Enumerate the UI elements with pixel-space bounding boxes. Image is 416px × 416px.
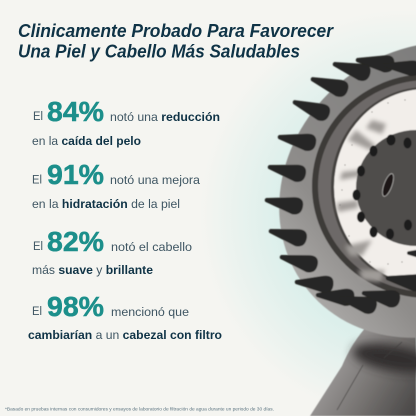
stat: 91%: notó una mejora bbox=[110, 173, 200, 187]
dark inner ring bbox=[312, 74, 416, 298]
charging slot bbox=[380, 172, 396, 198]
outer rim bbox=[219, 0, 416, 399]
stat: 82%: más suave y brillante bbox=[32, 263, 153, 277]
stat: 82% bbox=[32, 226, 192, 277]
stat: 98%: 98% bbox=[47, 291, 104, 322]
shower head product bbox=[219, 0, 416, 416]
stat: 84%: en la caída del pelo bbox=[32, 134, 141, 148]
centre plate bbox=[352, 130, 416, 246]
stat: 82%: 82% bbox=[47, 226, 104, 257]
stat: 98%: cambiarían a un cabezal con filtro bbox=[28, 328, 222, 342]
stat: 98%: El bbox=[32, 304, 42, 318]
footnote: *Basado en pruebas internas con consumidores y ensayos de laboratorio de filtración de agua durante un periodo de 30 días. bbox=[5, 406, 274, 412]
title: Clinicamente Probado Para Favorecer bbox=[18, 21, 334, 41]
stat: 91%: 91% bbox=[47, 159, 104, 190]
stat: 84% bbox=[32, 96, 220, 148]
title bbox=[18, 21, 334, 62]
stat: 84%: notó una reducción bbox=[110, 110, 220, 124]
title: Una Piel y Cabello Más Saludables bbox=[18, 42, 300, 62]
stat: 84%: 84% bbox=[47, 96, 104, 127]
nozzle spikes bbox=[264, 53, 416, 315]
mint glow bbox=[200, 10, 416, 416]
stat: 82%: El bbox=[33, 239, 43, 253]
stat: 82%: notó el cabello bbox=[111, 240, 192, 254]
stat: 98%: mencionó que bbox=[111, 305, 189, 319]
stat: 91%: en la hidratación de la piel bbox=[32, 197, 180, 211]
white face bbox=[334, 89, 416, 285]
stat: 91%: El bbox=[32, 172, 42, 186]
stat: 91% bbox=[32, 159, 200, 211]
handle bbox=[310, 320, 416, 416]
stat: 98% bbox=[28, 291, 222, 342]
stat: 84%: El bbox=[33, 109, 43, 123]
